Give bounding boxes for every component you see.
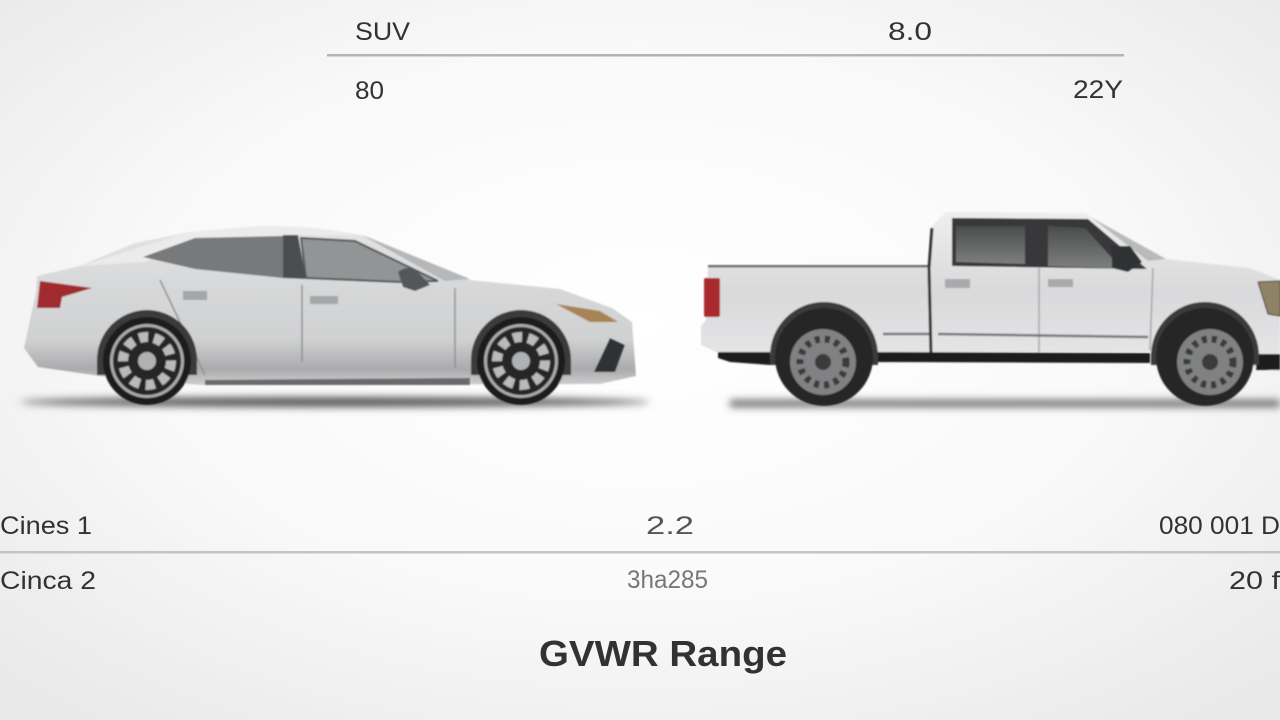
bottom table row 2 value: 3ha285 bbox=[627, 566, 708, 594]
truck bed rail bbox=[708, 265, 930, 268]
truck tail light bbox=[704, 278, 720, 317]
sedan front wheel bbox=[477, 317, 565, 405]
truck window frame bbox=[952, 218, 1147, 269]
truck body bbox=[701, 212, 1280, 372]
sedan pillar bbox=[283, 235, 306, 279]
sedan ground shadow bbox=[20, 397, 650, 407]
sedan rear wheel arch bbox=[97, 310, 197, 375]
sedan door lines bbox=[160, 280, 455, 375]
bottom table bbox=[0, 512, 1280, 595]
bottom table rule bbox=[0, 551, 1280, 554]
sedan front wheel arch bbox=[471, 310, 571, 375]
top table row value: 22Y bbox=[1073, 76, 1123, 104]
top table header: SUV: SUV bbox=[355, 18, 410, 46]
truck body crease bbox=[883, 334, 1148, 337]
truck rear window bbox=[956, 226, 1025, 264]
sedan sill shade bbox=[205, 378, 470, 385]
caption: GVWR Range: GVWR Range bbox=[539, 633, 787, 674]
truck mirror bbox=[1112, 246, 1142, 272]
truck rear wheel bbox=[775, 308, 873, 406]
truck cab seam bbox=[929, 228, 932, 355]
sedan front intake bbox=[594, 338, 625, 372]
truck rear wheel arch bbox=[770, 302, 878, 365]
truck ground shadow bbox=[730, 400, 1280, 407]
bottom table row 1 right value: 080 001 D bbox=[1159, 512, 1280, 540]
bottom table row 1 value: 2.2 bbox=[646, 512, 694, 540]
top table rule bbox=[327, 54, 1124, 56]
truck door handles bbox=[945, 279, 1073, 288]
illustration: sedan bbox=[20, 226, 650, 407]
sedan headlight bbox=[556, 304, 618, 322]
truck front wheel arch bbox=[1151, 302, 1259, 365]
top table row label: 80 bbox=[355, 77, 384, 105]
truck front window bbox=[1048, 226, 1112, 268]
truck headlight bbox=[1258, 281, 1280, 316]
sedan body bbox=[24, 226, 636, 385]
truck door line bbox=[1039, 268, 1153, 352]
top table bbox=[327, 18, 1124, 105]
sedan roof highlight bbox=[80, 226, 360, 266]
bottom table row 1 label: Cines 1 bbox=[0, 512, 92, 540]
bottom table row 2 label: Cinca 2 bbox=[0, 567, 96, 595]
illustration: pickup truck bbox=[701, 212, 1280, 407]
sedan rear wheel bbox=[103, 317, 191, 405]
truck windshield bbox=[1092, 218, 1166, 261]
sedan front window bbox=[301, 238, 438, 282]
sedan door handles bbox=[183, 291, 338, 304]
sedan mirror bbox=[398, 268, 430, 291]
sedan tail light bbox=[37, 281, 92, 308]
sedan windshield bbox=[360, 234, 470, 281]
truck front wheel bbox=[1156, 308, 1254, 406]
bottom table row 2 right value: 20 f bbox=[1229, 567, 1280, 595]
top table header: value: 8.0 bbox=[888, 18, 932, 46]
sedan rear window bbox=[143, 236, 283, 278]
truck running board bbox=[718, 352, 1280, 370]
